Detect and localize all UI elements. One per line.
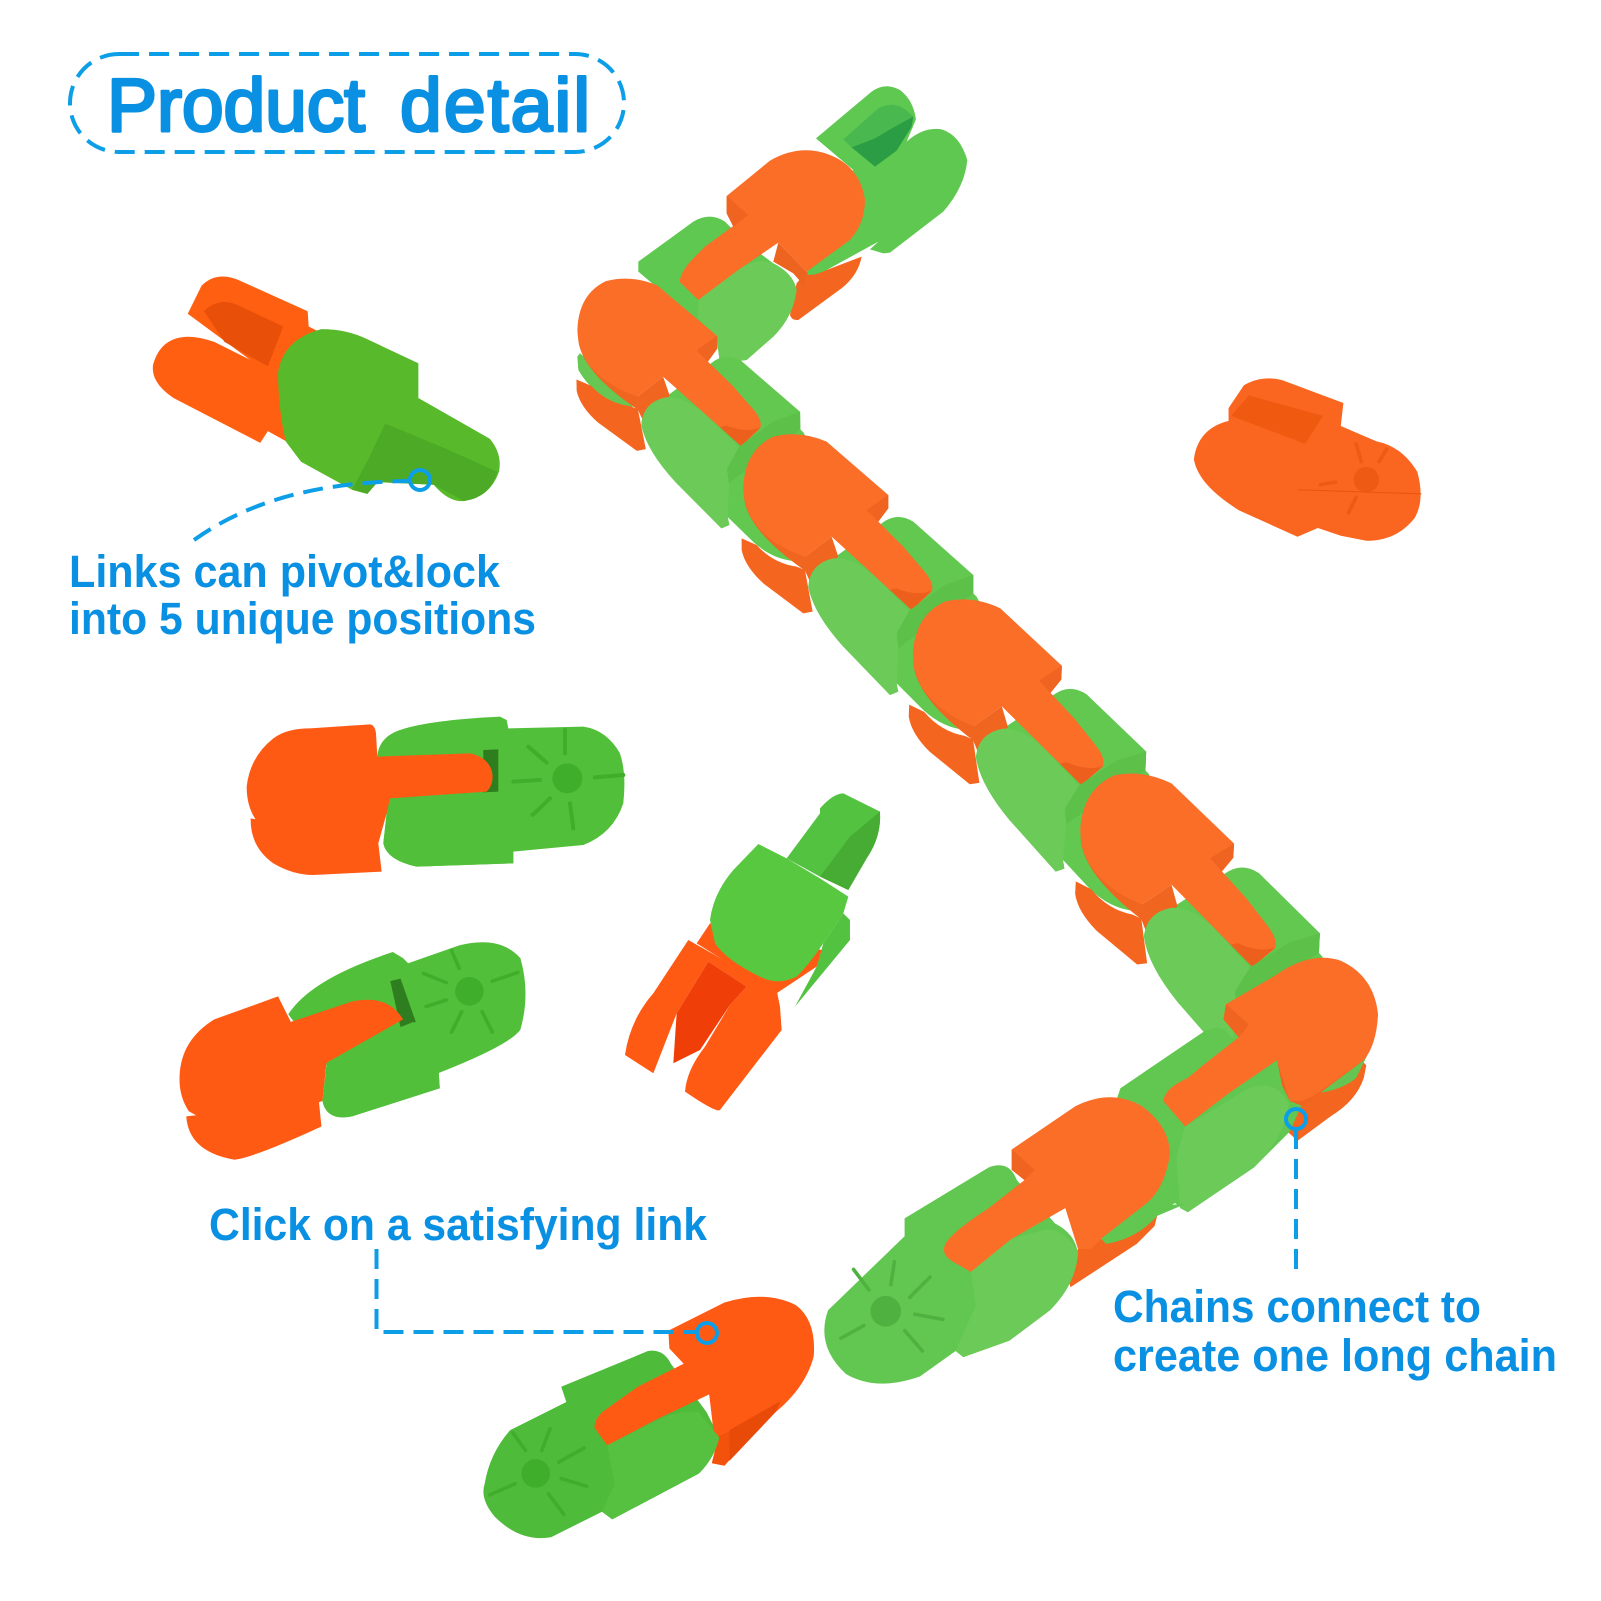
callout: chains connect: [1113, 1109, 1557, 1381]
loose link: vertical: [625, 793, 880, 1110]
loose link: bottom: [483, 1297, 814, 1538]
loose link: horizontal: [247, 717, 624, 875]
callout text: pivot: Links can pivot&lock: [69, 546, 501, 597]
title badge: [70, 54, 624, 152]
callout marker: pivot: [410, 470, 430, 490]
loose link: top right orange: [1194, 378, 1421, 541]
callout: links pivot: [69, 470, 536, 644]
loose link: top left pivot: [153, 277, 500, 501]
callout text: connect: Chains connect to: [1113, 1281, 1481, 1332]
callout: satisfying click: [209, 1199, 717, 1343]
chain: bottom links: [824, 958, 1378, 1384]
title text: detail: [400, 63, 590, 147]
callout marker: click: [697, 1323, 717, 1343]
chain link 4: [1065, 771, 1370, 1100]
callout marker: connect: [1286, 1109, 1306, 1129]
long chain: [575, 86, 1378, 1384]
title text: Product: [107, 63, 365, 147]
chain link 3: [902, 597, 1193, 913]
chain link 1: [575, 276, 841, 564]
callout text: pivot: into 5 unique positions: [69, 593, 536, 644]
loose link: angled with starburst: [179, 942, 526, 1160]
callout text: click: Click on a satisfying link: [209, 1199, 708, 1250]
chain: top links: [577, 86, 967, 410]
callout text: connect: create one long chain: [1113, 1330, 1557, 1381]
chain link 2: [742, 434, 1013, 730]
